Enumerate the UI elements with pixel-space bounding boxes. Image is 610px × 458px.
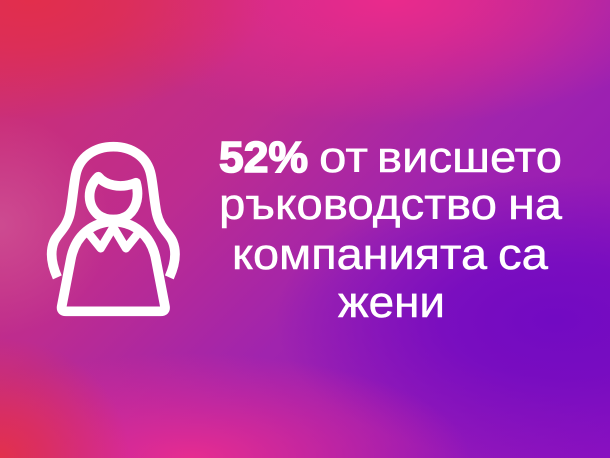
line 4: жени: [338, 278, 445, 327]
icon: woman with long hair: [52, 147, 175, 311]
headline text: са: [498, 230, 549, 279]
icon: face outline: [90, 177, 138, 219]
line 2: ръководство: [219, 180, 497, 229]
highlighted figure: 52%: [219, 133, 308, 182]
icon: body outline: [62, 222, 165, 311]
headline text: висшето: [377, 133, 562, 182]
headline text: на: [508, 180, 563, 229]
icon: collar: [90, 227, 137, 248]
headline text: [219, 133, 563, 327]
icon: hair outline: [52, 147, 175, 277]
line 3: компанията: [232, 230, 488, 279]
line 1: от: [319, 133, 368, 182]
